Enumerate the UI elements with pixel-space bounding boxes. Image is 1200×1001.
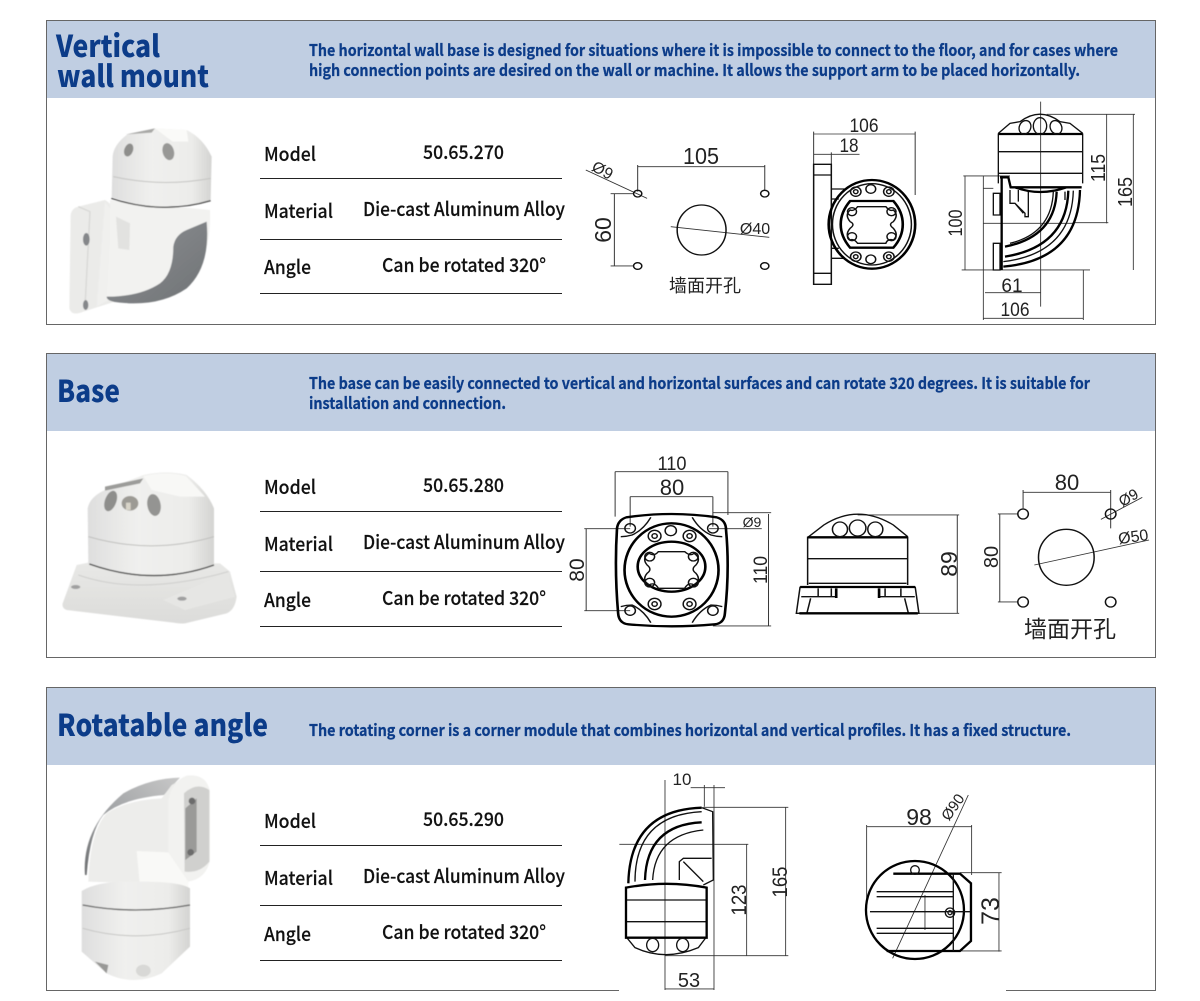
spec table: 50.65.280: [260, 471, 566, 626]
spec table: 50.65.290: Can be rotated 320°: [382, 918, 546, 945]
drawing: corner side view: 10: [673, 770, 691, 789]
spec table: 50.65.270: Angle: [264, 253, 311, 280]
drawing: base hole pattern: Ø9: [1116, 486, 1142, 510]
spec table: 50.65.290: 50.65.290: [423, 805, 504, 832]
spec table: 50.65.290: Model: [264, 807, 316, 834]
bottom border gap: [619, 985, 1006, 995]
spec table: 50.65.290: Angle: [264, 920, 311, 947]
spec table: 50.65.280: Model: [264, 473, 316, 500]
drawing: base top view: 110: [658, 454, 686, 475]
drawing: corner top view: 98: [906, 804, 932, 830]
drawing: base hole pattern: 80: [981, 546, 1003, 568]
panel: base: [46, 354, 1156, 658]
product photo: rotatable angle: [82, 775, 210, 980]
drawing: base top view: Ø9: [743, 514, 762, 530]
heading: rotatable angle: Rotatable angle: [57, 701, 268, 745]
drawing: base hole pattern: 80: [1055, 470, 1079, 495]
spec table: 50.65.280: Can be rotated 320°: [382, 584, 546, 611]
drawing: wall mount front view: 18: [840, 136, 858, 157]
spec table: 50.65.280: Material: [264, 530, 333, 557]
drawing: corner side view: [619, 770, 792, 992]
drawing: corner top view: [866, 791, 1005, 959]
drawing: wall hole pattern: [586, 143, 770, 296]
spec table: 50.65.270: Model: [264, 140, 316, 167]
spec table: 50.65.280: Die-cast Aluminum Alloy: [363, 528, 566, 555]
drawing: base top view: 110: [751, 556, 772, 584]
drawing: wall mount front view: 106: [850, 116, 878, 137]
spec table: 50.65.270: Can be rotated 320°: [382, 251, 546, 278]
heading: base: Base: [57, 367, 120, 411]
description: base: The base can be easily connected to vertical and horizontal surfaces and can rotate 320 degrees. It is suitable for: [309, 370, 1090, 394]
drawing: base top view: 80: [566, 558, 589, 582]
heading: vertical wall mount: wall mount: [57, 52, 209, 96]
drawing: wall mount side view: 100: [946, 210, 967, 236]
spec table: 50.65.270: [260, 138, 566, 294]
spec table: 50.65.270: Die-cast Aluminum Alloy: [363, 195, 566, 222]
heading: vertical wall mount: Vertical: [55, 22, 160, 66]
drawing: wall mount side view: 106: [1000, 300, 1030, 321]
spec table: 50.65.290: Die-cast Aluminum Alloy: [363, 862, 566, 889]
drawing: base side view: [796, 514, 962, 613]
drawing: corner top view: Ø90: [938, 791, 968, 824]
description: vertical wall mount: The horizontal wall base is designed for situations where it is impossible to connect to the floor, and for cases where: [309, 37, 1118, 61]
drawing: corner side view: 53: [678, 970, 700, 992]
drawing: base side view: 89: [936, 551, 962, 577]
header band: rotatable angle: [47, 688, 1155, 765]
drawing: wall mount side view: [946, 102, 1137, 321]
drawing: base top view: 80: [660, 475, 684, 500]
drawing: corner side view: 123: [728, 884, 751, 916]
spec table: 50.65.290: [260, 805, 566, 960]
spec table: 50.65.290: Material: [264, 864, 333, 891]
description: rotatable angle: The rotating corner is a corner module that combines horizontal and vertical profiles. It has a fixed structure.: [309, 717, 1071, 741]
spec table: 50.65.270: 50.65.270: [423, 138, 504, 165]
header band: vertical wall mount: [47, 21, 1155, 98]
drawing: wall hole pattern: 墙面开孔: [669, 276, 741, 296]
drawing: wall hole pattern: 60: [590, 217, 616, 243]
drawing: wall mount side view: 115: [1088, 154, 1110, 182]
drawing: wall hole pattern: Ø9: [589, 159, 616, 184]
product photo: wall mount: [69, 128, 212, 314]
drawing: wall hole pattern: 105: [683, 143, 719, 169]
spec table: 50.65.280: 50.65.280: [423, 471, 504, 498]
product photo: base: [62, 472, 237, 624]
drawing: base hole pattern: 墙面开孔: [1024, 616, 1116, 642]
drawing: base top view: [566, 454, 772, 626]
header band: base: [47, 354, 1155, 431]
drawing: corner top view: 73: [977, 897, 1005, 925]
drawing: base hole pattern: Ø50: [1117, 527, 1150, 548]
spec table: 50.65.270: Material: [264, 197, 333, 224]
drawing: wall mount front view: [814, 116, 915, 284]
panel: rotatable angle: [46, 688, 1156, 995]
spec table: 50.65.280: Angle: [264, 586, 311, 613]
panel: vertical wall mount: [46, 20, 1156, 324]
drawing: wall mount side view: 165: [1115, 177, 1137, 207]
drawing: wall hole pattern: Ø40: [740, 221, 770, 238]
description: vertical wall mount: high connection points are desired on the wall or machine. It allows the support arm to be placed horizontally.: [309, 57, 1080, 81]
drawing: base hole pattern: [981, 470, 1150, 642]
drawing: wall mount side view: 61: [1001, 276, 1023, 297]
drawing: corner side view: 165: [769, 866, 792, 898]
description: base: installation and connection.: [309, 390, 506, 414]
